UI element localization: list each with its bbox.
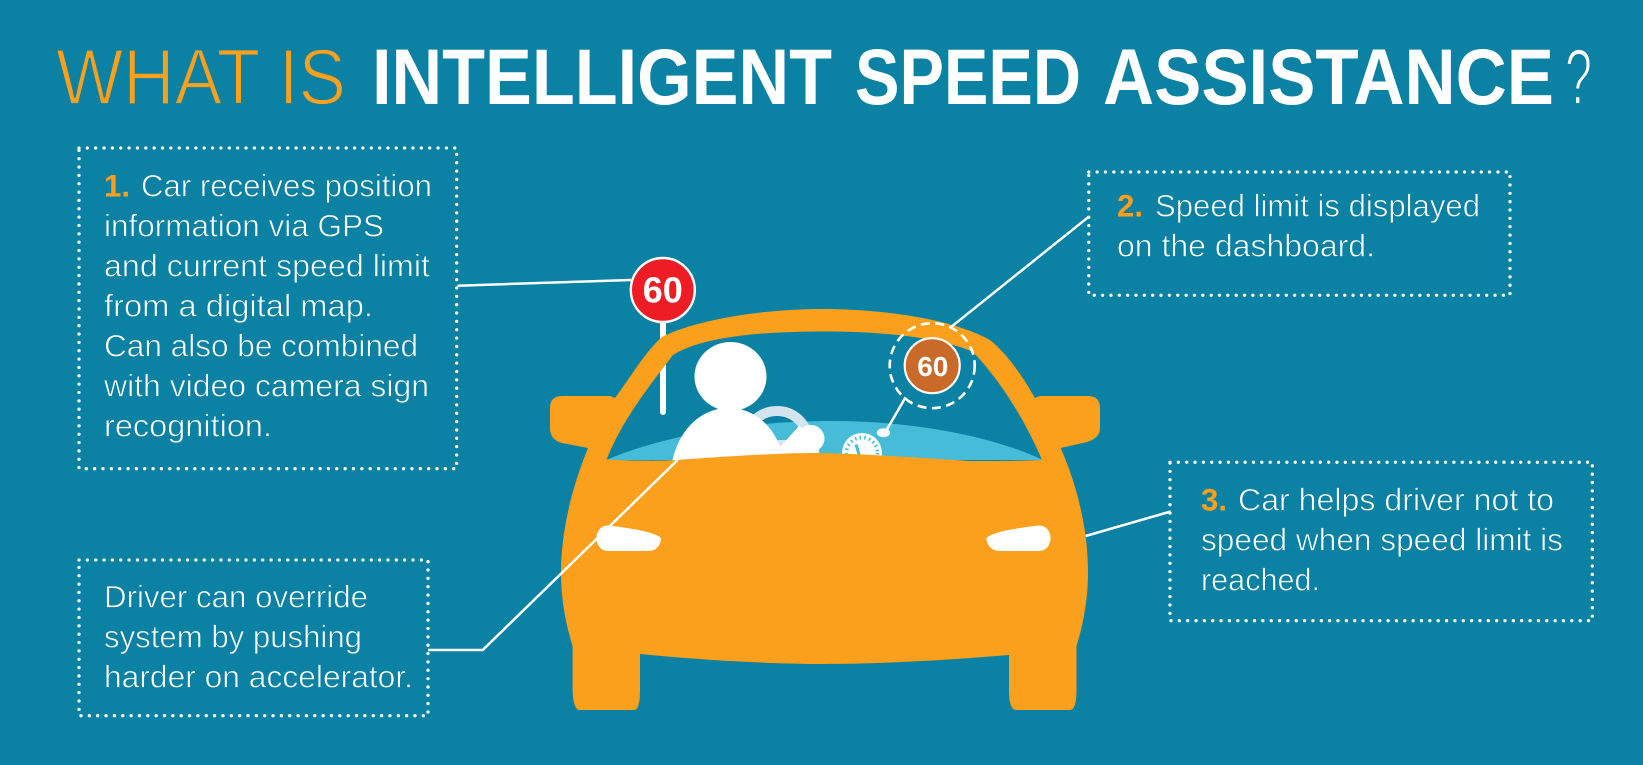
dashboard <box>606 421 1043 460</box>
connector: box 3 to car <box>1086 512 1171 536</box>
callout 1: position information: recognition. <box>104 408 272 444</box>
title: ASSISTANCE <box>1103 33 1554 121</box>
callout 1: position information: Car receives position <box>141 168 432 204</box>
connector: box 1 to sign <box>458 280 631 286</box>
callout: driver override: system by pushing <box>104 619 362 655</box>
title: WHAT IS <box>56 33 346 121</box>
callout 2: speed limit displayed <box>1089 172 1510 295</box>
right headlight <box>986 526 1050 551</box>
callout 2: speed limit displayed: on the dashboard. <box>1117 228 1375 264</box>
connector: display to dashboard <box>877 397 906 437</box>
speed limit road sign <box>631 258 695 322</box>
driver <box>672 342 824 462</box>
callout 2: speed limit displayed: Speed limit is displayed <box>1155 188 1480 224</box>
callout 1: position information: information via GPS <box>104 208 384 244</box>
callout: driver override: harder on accelerator. <box>104 659 413 695</box>
connector: override box to accelerator <box>428 460 678 650</box>
callout: driver override <box>79 560 428 716</box>
callout 3: car helps driver: speed when speed limit is <box>1201 522 1563 558</box>
title: INTELLIGENT <box>372 33 832 121</box>
dashboard speed limit display <box>890 323 975 408</box>
callout 2: speed limit displayed: 2. <box>1117 188 1143 224</box>
callout 1: position information: and current speed limit <box>104 248 430 284</box>
title <box>56 33 1592 121</box>
steering wheel <box>746 411 808 471</box>
callout 3: car helps driver: 3. <box>1201 482 1227 518</box>
sign post <box>660 320 666 415</box>
callout 1: position information <box>79 148 457 469</box>
callout: driver override: Driver can override <box>104 579 368 615</box>
speed limit road sign: 60 <box>643 269 683 310</box>
callout 1: position information: with video camera sign <box>103 368 429 404</box>
callout 1: position information: 1. <box>104 168 130 204</box>
callout 1: position information: from a digital map. <box>104 288 373 324</box>
dashboard speed limit display: 60 <box>917 351 948 382</box>
callout 3: car helps driver <box>1170 462 1592 621</box>
connector: box 2 to display <box>951 217 1089 327</box>
left headlight <box>596 526 661 551</box>
callout 3: car helps driver: Car helps driver not to <box>1238 482 1554 518</box>
title: ? <box>1565 33 1592 121</box>
title: SPEED <box>855 33 1081 121</box>
callout 1: position information: Can also be combined <box>104 328 418 364</box>
car body <box>550 309 1100 710</box>
callout 3: car helps driver: reached. <box>1201 562 1320 598</box>
speedometer <box>842 433 882 473</box>
car illustration <box>550 309 1100 710</box>
